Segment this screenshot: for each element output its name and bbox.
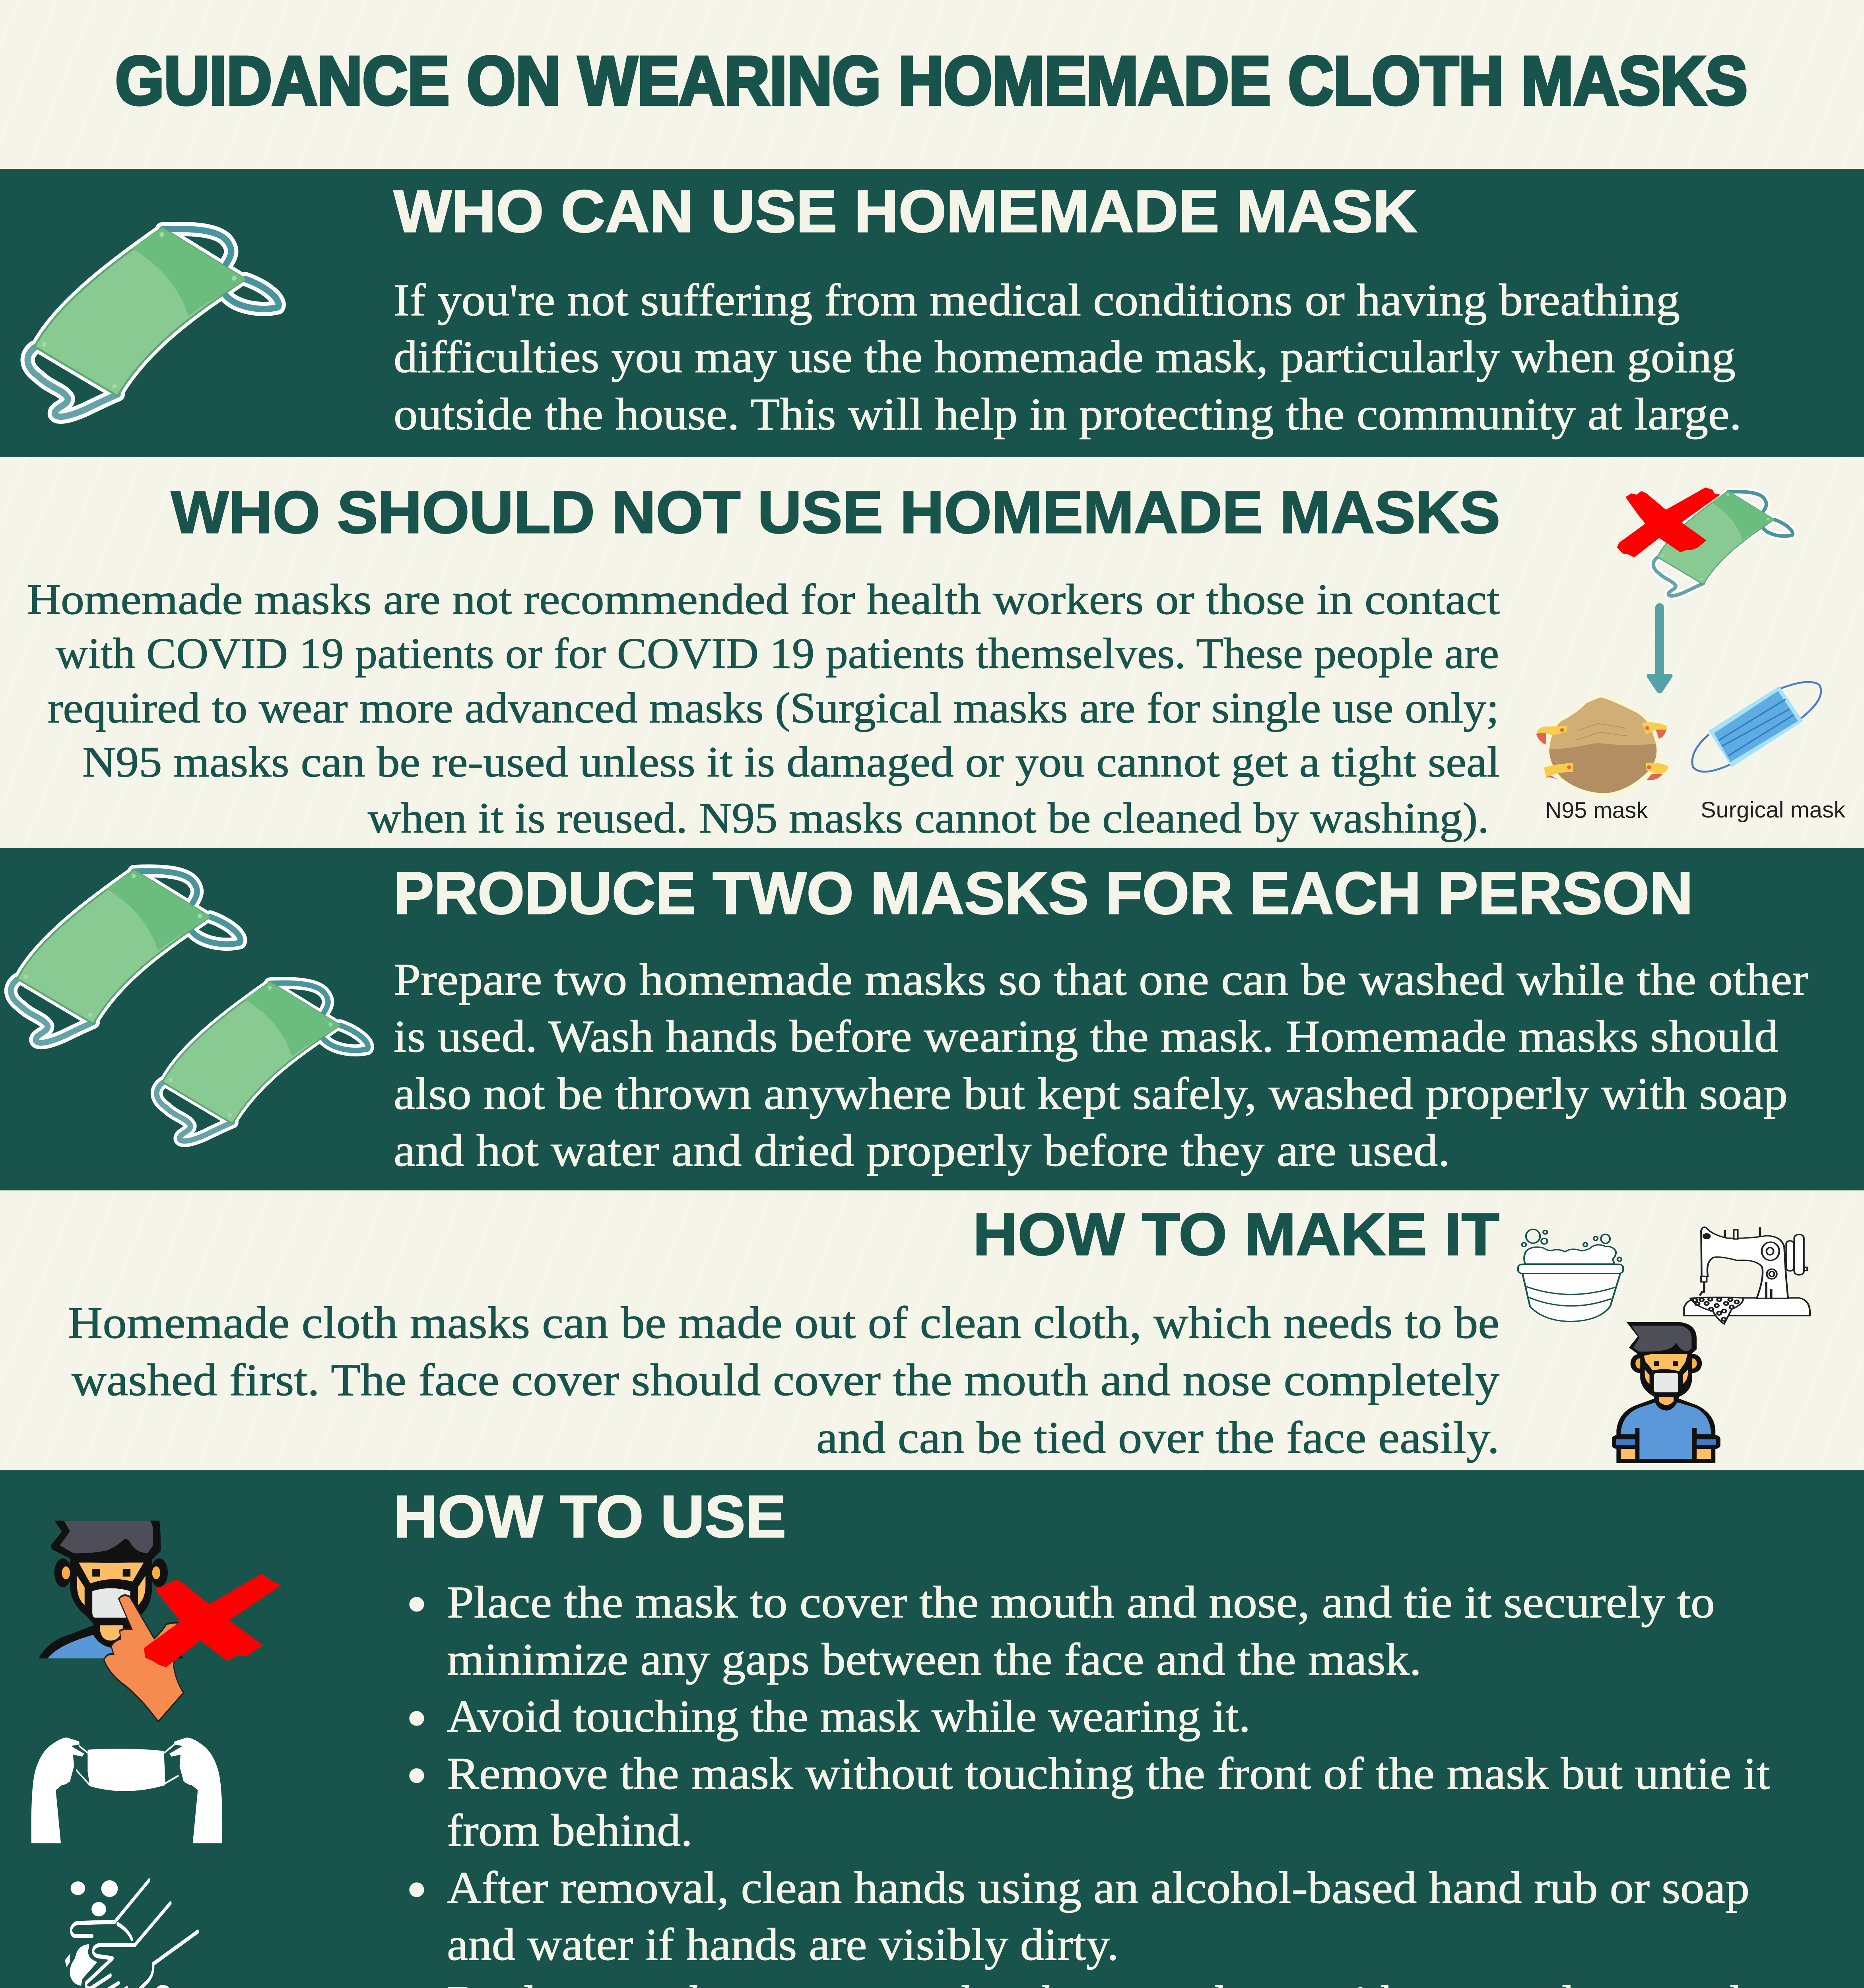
text block (68, 1297, 1499, 1463)
text block: If you're not suffering from medical conditions or having breathing (394, 275, 1680, 325)
panel: produce two masks for each person (0, 848, 1864, 1190)
title: GUIDANCE ON WEARING HOMEMADE CLOTH MASKS (115, 43, 1748, 119)
text block: with COVID 19 patients or for COVID 19 patients themselves. These people are (56, 629, 1499, 678)
heading: HOW TO USE (394, 1483, 786, 1550)
icon: person wearing mask (1612, 1322, 1720, 1463)
text block: Homemade masks are not recommended for health workers or those in contact (27, 575, 1500, 623)
heading: WHO SHOULD NOT USE HOMEMADE MASKS (171, 479, 1500, 546)
icon: green mask (28, 228, 279, 417)
bullet list: Place the mask to cover the mouth and nose, and tie it securely to (447, 1577, 1715, 1627)
text block (394, 954, 1808, 1176)
heading: PRODUCE TWO MASKS FOR EACH PERSON (394, 860, 1693, 926)
panel: how to make it (68, 1201, 1810, 1463)
bullet list: Remove the mask without touching the front of the mask but untie it (447, 1748, 1770, 1799)
label: surgical mask: Surgical mask (1701, 797, 1846, 823)
icon: surgical mask (1692, 682, 1821, 772)
text block (27, 575, 1500, 842)
bullet list: Avoid touching the mask while wearing it. (447, 1691, 1250, 1741)
icon: small mask (157, 982, 368, 1141)
icon: washing hands (65, 1880, 198, 1988)
panel: how to use (0, 1470, 1864, 1988)
text block: difficulties you may use the homemade mask, particularly when going (394, 332, 1736, 382)
text block: also not be thrown anywhere but kept safely, washed properly with soap (394, 1068, 1788, 1119)
icon: N95 mask (1536, 693, 1668, 797)
bullet list (410, 1577, 1770, 1988)
text block: when it is reused. N95 masks cannot be cleaned by washing). (368, 794, 1489, 842)
text block: outside the house. This will help in protecting the community at large. (394, 389, 1742, 439)
heading: HOW TO MAKE IT (973, 1201, 1499, 1268)
icon: crossed-out cloth mask (1617, 487, 1793, 596)
text block: and hot water and dried properly before they are used. (394, 1125, 1450, 1176)
text block: required to wear more advanced masks (Surgical masks are for single use only; (48, 684, 1499, 732)
text block: N95 masks can be re-used unless it is damaged or you cannot get a tight seal (82, 738, 1500, 786)
text block (394, 275, 1742, 439)
text block: washed first. The face cover should cover the mouth and nose completely (72, 1355, 1499, 1405)
bullet list: After removal, clean hands using an alcohol-based hand rub or soap (447, 1862, 1749, 1913)
icon: red cross (144, 1574, 281, 1667)
panel: who can use homemade mask (0, 169, 1864, 457)
panel: who should not use homemade masks (27, 479, 1846, 842)
icon: person touching mask (39, 1521, 184, 1722)
icon: large mask (11, 870, 241, 1043)
text block: Homemade cloth masks can be made out of clean cloth, which needs to be (68, 1297, 1499, 1348)
bullet list: from behind. (447, 1805, 693, 1856)
bullet list: minimize any gaps between the face and the mask. (447, 1634, 1421, 1685)
heading: WHO CAN USE HOMEMADE MASK (394, 178, 1417, 245)
icon: hands holding mask (31, 1738, 222, 1843)
icon: sewing machine (1684, 1227, 1810, 1324)
text block: and can be tied over the face easily. (816, 1412, 1499, 1463)
label: N95 mask: N95 mask (1545, 798, 1648, 823)
bullet list: and water if hands are visibly dirty. (447, 1919, 1119, 1970)
text block: Prepare two homemade masks so that one can be washed while the other (394, 954, 1808, 1005)
text block: is used. Wash hands before wearing the mask. Homemade masks should (394, 1011, 1778, 1062)
icon: wash basin (1518, 1229, 1623, 1322)
arrow (1647, 603, 1673, 693)
